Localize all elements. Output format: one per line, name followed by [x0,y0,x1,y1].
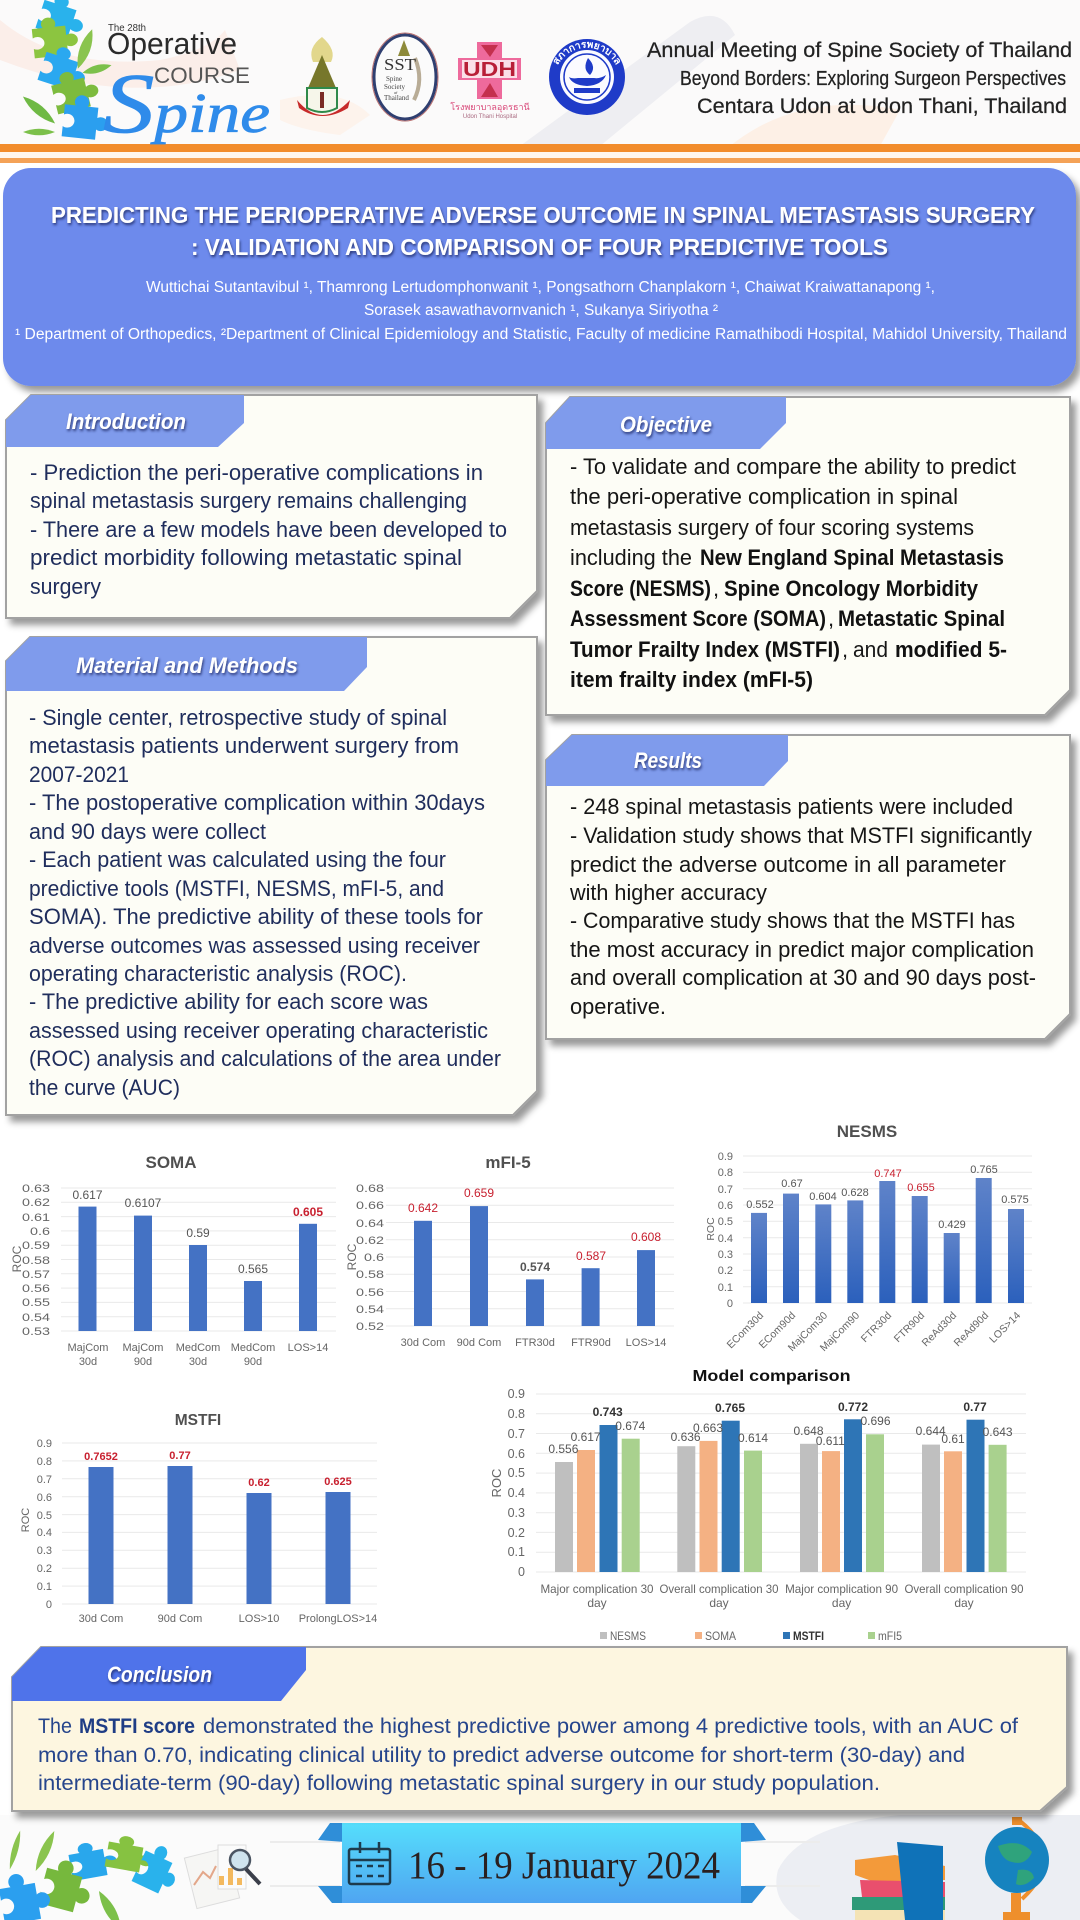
comparison bars: mFI5 [622,1434,1007,1572]
mFI-5 axis: 0.64 [356,1216,384,1230]
mFI-5 categories [401,1337,666,1349]
MSTFI values [84,1450,352,1489]
methods text: - Each patient was calculated using the four [29,847,446,872]
comparison categories: day [709,1596,729,1610]
panel: objective [546,397,1070,715]
NESMS axis [705,1151,1032,1310]
authors and affiliations: Wuttichai Sutantavibul ¹, Thamrong Lertudomphonwanit ¹, Pongsathorn Chanplakorn ¹, Chaiwat Kraiwattanapong ¹, [146,279,935,296]
methods text: predictive tools (MSTFI, NESMS, mFI-5, and [29,876,444,901]
icon: globe [985,1817,1049,1920]
mFI-5 axis: 0.6 [364,1250,384,1264]
NESMS values: 0.67 [781,1178,803,1190]
comparison values: 0.765 [715,1401,745,1415]
mFI-5 categories: 90d Com [457,1337,501,1349]
MSTFI axis: ROC [20,1508,32,1532]
SOMA axis: 0.53 [22,1324,50,1338]
SOMA axis: 0.62 [22,1195,50,1209]
logo wordmark: Operative [107,26,237,61]
logo: Udon Thani Hospital [450,42,530,120]
icon: books [852,1842,945,1920]
methods text [29,705,501,1100]
NESMS axis: 0.9 [718,1151,733,1163]
NESMS categories: LOS>14 [987,1310,1023,1346]
comparison bars: MSTFI [600,1419,984,1572]
comparison values: 0.648 [793,1424,824,1438]
objective text: Metastatic Spinal [838,606,1005,631]
methods text: - The predictive ability for each score was [29,989,428,1014]
NESMS values: 0.765 [970,1164,998,1176]
NESMS values: 0.655 [907,1182,935,1194]
logo: nursing council seal: สภาการพยาบาล [554,42,620,65]
date ribbon [318,1823,766,1903]
comparison values [548,1400,1013,1456]
NESMS axis: 0.8 [718,1167,733,1179]
chart: model comparison [489,1368,1026,1643]
SOMA categories: MajCom [68,1342,108,1354]
NESMS axis: ROC [705,1217,717,1241]
mFI-5 axis: 0.66 [356,1198,384,1212]
logo: Udon Thani Hospital: Udon Thani Hospital [463,114,517,120]
authors and affiliations: Sorasek asawathavornvanich ¹, Sukanya Siriyotha ² [364,302,718,319]
objective text: , [713,576,719,601]
NESMS axis: 0 [727,1298,733,1310]
introduction text: surgery [30,574,101,599]
mFI-5 bars [414,1206,655,1326]
SOMA categories: MajCom [123,1342,163,1354]
SOMA values: 0.6107 [125,1196,162,1210]
MSTFI axis [20,1438,377,1611]
mFI-5 axis: 0.52 [356,1319,384,1333]
comparison values: 0.77 [963,1400,987,1414]
NESMS values: 0.747 [874,1168,902,1180]
results text: - Validation study shows that MSTFI significantly [570,823,1032,848]
SOMA axis: 0.63 [22,1181,50,1195]
authors and affiliations [15,279,1067,343]
SOMA axis: ROC [10,1245,24,1272]
objective text: Score (NESMS) [570,576,711,601]
SOMA axis: 0.55 [22,1295,50,1309]
objective text: , [842,637,848,662]
mFI-5 axis: 0.58 [356,1267,384,1281]
MSTFI axis: 0.2 [37,1563,52,1575]
MSTFI values: 0.7652 [84,1451,118,1463]
objective text: including the [570,545,692,570]
results text: with higher accuracy [569,880,767,905]
main title [51,202,1035,260]
SOMA values: 0.565 [238,1262,268,1276]
comparison categories: day [832,1596,851,1610]
NESMS axis: 0.3 [718,1249,733,1261]
methods heading: Material and Methods [76,653,298,678]
MSTFI categories: 90d Com [158,1613,202,1625]
objective text: - To validate and compare the ability to predict [570,454,1016,479]
icon: puzzle pieces and leaves [0,1829,186,1920]
results text: the most accuracy in predict major complication [570,937,1034,962]
MSTFI values: 0.77 [169,1450,191,1462]
mFI-5 categories: FTR90d [571,1337,611,1349]
NESMS categories: FTR30d [859,1310,894,1345]
mFI-5 values [408,1186,661,1274]
conference details: Annual Meeting of Spine Society of Thailand [647,39,1072,62]
logo: Udon Thani Hospital: โรงพยาบาลอุดรธานี [450,102,530,113]
conclusion heading: Conclusion [107,1662,212,1687]
objective text: item frailty index (mFI-5) [570,667,813,692]
results text: and overall complication at 30 and 90 days post- [570,965,1036,990]
panel: material and methods [6,637,537,1115]
NESMS categories: ECom30d [725,1310,766,1351]
icon: report and magnifier [184,1845,260,1909]
introduction text: spinal metastasis surgery remains challenging [30,488,467,513]
conclusion text: demonstrated the highest predictive power among 4 predictive tools, with an AUC of [203,1714,1018,1738]
mFI-5 axis: 0.56 [356,1285,384,1299]
chart: model comparison: Model comparison [692,1368,850,1385]
chart: SOMA [10,1153,336,1368]
chart: MSTFI [20,1412,377,1625]
comparison categories: Major complication 30 [540,1582,654,1596]
NESMS categories: MajCom90 [818,1310,862,1354]
comparison axis: 0 [518,1565,525,1579]
logo: Spine Society of Thailand [372,33,438,121]
comparison legend: mFI5 [878,1629,902,1643]
logo wordmark: The 28th [108,22,146,34]
SOMA categories: 30d [79,1356,97,1368]
logo wordmark: COURSE [154,63,250,88]
NESMS axis: 0.4 [718,1233,733,1245]
mFI-5 categories: 30d Com [401,1337,445,1349]
introduction heading [6,395,244,447]
mFI-5 axis: 0.54 [356,1302,384,1316]
results text: operative. [570,994,666,1019]
comparison values: 0.617 [571,1430,601,1444]
logo: Spine Society of Thailand: Society [384,83,405,91]
NESMS values: 0.628 [841,1187,869,1199]
SOMA values: 0.59 [186,1226,210,1240]
chart: NESMS: NESMS [837,1122,897,1141]
NESMS values [746,1164,1029,1231]
conclusion text: MSTFI score [79,1714,195,1738]
logo: nursing council seal [549,39,625,115]
NESMS values: 0.552 [746,1199,774,1211]
chart: NESMS [705,1122,1032,1354]
methods text: 2007-2021 [29,762,129,787]
methods text: SOMA). The predictive ability of these tools for [29,904,483,929]
results heading: Results [634,748,702,773]
SOMA categories: 90d [134,1356,152,1368]
SOMA categories: 30d [189,1356,207,1368]
objective text: metastasis surgery of four scoring systems [570,515,974,540]
header banner [0,0,1080,163]
comparison axis: 0.3 [508,1506,525,1520]
NESMS categories: ReAd30d [920,1310,959,1349]
comparison categories: day [954,1596,974,1610]
mFI-5 values: 0.642 [408,1201,438,1215]
panel: introduction [6,395,537,618]
MSTFI axis: 0.7 [37,1474,52,1486]
comparison bars: NESMS [555,1444,940,1572]
SOMA categories [68,1342,328,1368]
methods text: operating characteristic analysis (ROC). [29,961,407,986]
MSTFI categories: LOS>10 [239,1613,279,1625]
methods text: adverse outcomes was assessed using receiver [29,933,480,958]
SOMA axis: 0.57 [22,1267,50,1281]
authors and affiliations: ¹ Department of Orthopedics, ²Department of Clinical Epidemiology and Statistic, Faculty of medicine Ramathibodi Hospital, Mahidol University, Thailand [15,326,1067,343]
comparison legend: MSTFI [793,1629,824,1643]
orange stripes [0,144,1080,163]
comparison categories: Overall complication 30 [660,1582,779,1596]
comparison categories: day [587,1596,607,1610]
objective text: and [853,637,888,662]
SOMA categories: LOS>14 [288,1342,328,1354]
methods text: metastasis patients underwent surgery from [29,733,459,758]
comparison values: 0.611 [816,1434,845,1448]
chart: mFI-5: mFI-5 [485,1153,531,1172]
introduction text [30,460,507,599]
comparison axis: 0.9 [508,1387,525,1401]
objective heading: Objective [620,412,712,437]
comparison values: 0.674 [615,1419,646,1433]
MSTFI axis: 0.1 [37,1581,52,1593]
NESMS values: 0.575 [1001,1194,1029,1206]
chart: MSTFI: MSTFI [175,1412,221,1429]
introduction text: predict morbidity following metastatic spinal [30,545,462,570]
results text: - 248 spinal metastasis patients were included [570,794,1013,819]
comparison legend: NESMS [610,1629,646,1643]
SOMA axis: 0.6 [30,1224,50,1238]
NESMS categories: FTR90d [892,1310,927,1345]
introduction text: - There are a few models have been developed to [30,517,507,542]
results text [569,794,1036,1019]
mFI-5 axis: 0.68 [356,1181,384,1195]
logo wordmark [103,22,270,151]
mFI-5 axis [345,1181,674,1333]
MSTFI axis: 0.5 [37,1510,52,1522]
MSTFI axis: 0.3 [37,1545,52,1557]
objective text: , [828,606,834,631]
introduction heading: Introduction [66,409,186,434]
comparison values: 0.743 [593,1405,623,1419]
comparison values: 0.663 [693,1421,723,1435]
panel: results [546,735,1070,1039]
NESMS categories: ECom90d [757,1310,798,1351]
objective text: Tumor Frailty Index (MSTFI) [570,637,840,662]
logo: Spine Society of Thailand: of [394,90,398,95]
logo: Spine Society of Thailand: SST [384,55,417,74]
objective text: New England Spinal Metastasis [700,545,1004,570]
mFI-5 categories: FTR30d [515,1337,555,1349]
SOMA values [72,1188,323,1276]
NESMS axis: 0.5 [718,1216,733,1228]
MSTFI categories [79,1613,377,1625]
NESMS axis: 0.2 [718,1265,733,1277]
comparison categories: Major complication 90 [785,1582,898,1596]
SOMA values: 0.605 [293,1205,323,1219]
comparison categories [540,1582,1024,1610]
introduction text: - Prediction the peri-operative complications in [30,460,483,485]
objective text [570,454,1016,692]
MSTFI values: 0.625 [324,1476,352,1488]
comparison values: 0.696 [860,1414,891,1428]
comparison values: 0.636 [671,1430,701,1444]
methods text: - The postoperative complication within 30days [29,790,485,815]
comparison axis: ROC [489,1469,504,1497]
objective text: the peri-operative complication in spinal [570,484,958,509]
logo: Udon Thani Hospital: UDH [463,59,516,81]
comparison axis: 0.8 [508,1407,525,1421]
NESMS axis: 0.7 [718,1184,733,1196]
SOMA axis: 0.61 [22,1210,50,1224]
methods heading [6,637,367,691]
conclusion text: The [38,1714,72,1738]
mFI-5 values: 0.659 [464,1186,494,1200]
NESMS values: 0.604 [809,1191,837,1203]
comparison values: 0.614 [738,1431,768,1445]
mFI-5 values: 0.608 [631,1230,661,1244]
chart: SOMA: SOMA [146,1153,196,1172]
conference details [647,39,1072,118]
SOMA categories: 90d [244,1356,262,1368]
SOMA axis: 0.56 [22,1281,50,1295]
comparison axis: 0.6 [508,1447,525,1461]
logo: Spine Society of Thailand: Thailand [384,94,409,102]
conclusion text [38,1714,1018,1795]
objective text: Spine Oncology Morbidity [724,576,979,601]
MSTFI axis: 0 [46,1599,52,1611]
footer background [0,1815,1080,1920]
comparison legend [600,1629,902,1643]
SOMA categories: MedCom [176,1342,220,1354]
conclusion heading [12,1647,306,1701]
SOMA axis: 0.54 [22,1310,50,1324]
NESMS axis: 0.6 [718,1200,733,1212]
methods text: (ROC) analysis and calculations of the area under [29,1046,501,1071]
comparison axis: 0.4 [508,1486,525,1500]
comparison values: 0.556 [548,1442,579,1456]
NESMS values: 0.429 [938,1219,966,1231]
methods text: assessed using receiver operating characteristic [29,1018,488,1043]
NESMS categories [725,1310,1023,1354]
methods text: - Single center, retrospective study of spinal [29,705,447,730]
mFI-5 values: 0.574 [520,1260,550,1274]
SOMA categories: MedCom [231,1342,275,1354]
SOMA axis: 0.59 [22,1238,50,1252]
logo: Spine Society of Thailand: Spine [386,75,402,83]
SOMA bars [78,1207,317,1331]
NESMS axis: 0.1 [718,1282,733,1294]
conclusion text: more than 0.70, indicating clinical utility to predict adverse outcome for short-term (30-day) and [38,1743,965,1767]
conclusion text: intermediate-term (90-day) following metastatic spinal surgery in our study population. [38,1771,880,1795]
mFI-5 values: 0.587 [576,1249,606,1263]
comparison axis [489,1387,1026,1579]
comparison legend: SOMA [705,1629,736,1643]
MSTFI bars [88,1466,350,1604]
panel: conclusion [12,1647,1067,1811]
mFI-5 categories: LOS>14 [626,1337,666,1349]
comparison axis: 0.7 [508,1427,525,1441]
NESMS bars [751,1178,1024,1303]
objective text: Assessment Score (SOMA) [570,606,826,631]
comparison categories: Overall complication 90 [904,1582,1024,1596]
SOMA axis [10,1181,336,1338]
comparison bars: SOMA [577,1441,962,1572]
logo wordmark: Spine [103,55,270,151]
methods text: the curve (AUC) [29,1075,180,1100]
MSTFI values: 0.62 [248,1477,270,1489]
results heading [546,735,788,786]
results text: - Comparative study shows that the MSTFI has [570,908,1015,933]
logo: puzzle spine and leaves [20,0,112,141]
NESMS categories: ReAd90d [952,1310,991,1349]
MSTFI axis: 0.4 [37,1527,52,1539]
mFI-5 axis: 0.62 [356,1233,384,1247]
methods text: and 90 days were collect [29,819,266,844]
results text: predict the adverse outcome in all parameter [570,852,1006,877]
SOMA values: 0.617 [72,1188,103,1202]
MSTFI axis: 0.9 [37,1438,52,1450]
icon: calendar [349,1842,390,1884]
logo: royal college crest [297,37,350,116]
MSTFI categories: 30d Com [79,1613,123,1625]
mFI-5 axis: ROC [345,1243,359,1270]
chart: mFI-5 [345,1153,674,1349]
MSTFI categories: ProlongLOS>14 [299,1613,377,1625]
title panel [3,168,1076,386]
comparison axis: 0.1 [508,1545,525,1559]
comparison axis: 0.5 [508,1466,525,1480]
objective heading [546,397,786,449]
comparison values: 0.61 [941,1432,965,1446]
date text: 16 - 19 January 2024 [408,1844,720,1887]
comparison values: 0.772 [838,1400,868,1414]
conference details: Centara Udon at Udon Thani, Thailand [697,95,1067,118]
main title: : VALIDATION AND COMPARISON OF FOUR PREDICTIVE TOOLS [191,234,888,260]
MSTFI axis: 0.8 [37,1456,52,1468]
comparison axis: 0.2 [508,1526,525,1540]
main title: PREDICTING THE PERIOPERATIVE ADVERSE OUTCOME IN SPINAL METASTASIS SURGERY [51,202,1035,228]
SOMA axis: 0.58 [22,1253,50,1267]
MSTFI axis: 0.6 [37,1492,52,1504]
objective text: modified 5- [895,637,1007,662]
NESMS categories: MajCom30 [786,1310,830,1354]
comparison values: 0.644 [916,1424,946,1438]
comparison values: 0.643 [983,1425,1013,1439]
